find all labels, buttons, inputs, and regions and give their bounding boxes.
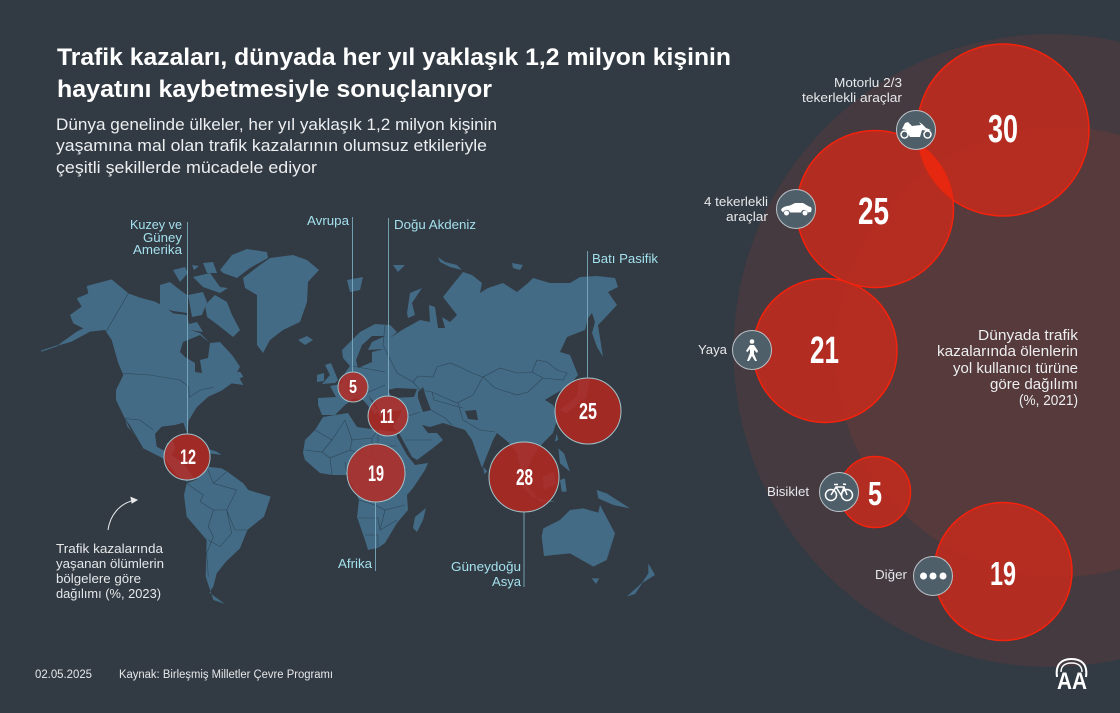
label: Güneydoğu Asya: Güneydoğu — [451, 560, 521, 574]
logo: AA: AA — [1057, 668, 1087, 695]
label: Bisiklet: Bisiklet — [767, 485, 810, 499]
title: Trafik kazaları, dünyada her yıl yaklaşık 1,2 milyon kişinin — [57, 44, 731, 71]
map: Eurasia — [317, 257, 618, 477]
subtitle: yaşamına mal olan trafik kazalarının olumsuz etkileriyle — [56, 137, 487, 155]
bubble: 19 — [934, 502, 1072, 640]
label: Diğer: Diğer — [875, 568, 907, 582]
region bubble: 19: 19 — [368, 461, 384, 486]
label: Güneydoğu Asya: Asya — [492, 575, 521, 589]
label: Yaya: Yaya — [698, 343, 727, 357]
map caption: dağılımı (%, 2023) — [56, 586, 161, 601]
title — [57, 44, 731, 103]
Caspian Sea — [418, 387, 431, 412]
region bubble: 25: 25 — [579, 398, 597, 424]
label: Kuzey ve Güney Amerika: Kuzey ve — [130, 218, 182, 232]
title: hayatını kaybetmesiyle sonuçlanıyor — [57, 76, 492, 103]
region bubble: 11 — [368, 396, 408, 436]
outer background circle — [734, 34, 1120, 667]
leader lines — [188, 217, 588, 587]
bubble values — [810, 108, 1018, 592]
bubble: 30 — [917, 44, 1089, 216]
region bubble: 19 — [347, 444, 405, 502]
logo: AA — [1057, 659, 1087, 695]
chart caption: Dünyada trafik — [978, 328, 1079, 344]
footer date: 02.05.2025 — [35, 669, 92, 681]
label: Doğu Akdeniz: Doğu Akdeniz — [394, 218, 476, 232]
label: Kuzey ve Güney Amerika — [130, 218, 183, 257]
bubble: 5 — [840, 456, 910, 528]
bubble: 25 — [796, 130, 954, 288]
chart caption — [937, 328, 1079, 409]
icon: pedestrian — [732, 330, 772, 370]
overlap lens — [920, 148, 954, 200]
map: North and South America mainland — [41, 279, 271, 604]
icon: motorcycle — [896, 110, 936, 150]
road user bubbles — [753, 44, 1089, 640]
footer source: Kaynak: Birleşmiş Milletler Çevre Programı — [119, 669, 333, 681]
label: 4 tekerlekli araçlar — [704, 195, 768, 224]
label: Motorlu 2/3 tekerlekli araçlar — [802, 76, 902, 105]
label: Motorlu 2/3 tekerlekli araçlar: Motorlu 2/3 — [834, 76, 902, 90]
chart caption: yol kullanıcı türüne — [953, 361, 1078, 377]
region bubble: 12: 12 — [180, 446, 196, 469]
subtitle: çeşitli şekillerde mücadele ediyor — [56, 159, 318, 177]
Hudson Bay — [180, 335, 210, 373]
chart caption: kazalarında ölenlerin — [937, 344, 1078, 360]
world map — [41, 249, 655, 604]
Black Sea — [388, 388, 417, 398]
inner background circle — [835, 127, 1120, 577]
bubble: 21 — [753, 278, 897, 422]
bubble values: 19 — [990, 555, 1016, 592]
label: Motorlu 2/3 tekerlekli araçlar: tekerlekli araçlar — [802, 91, 902, 105]
region bubble: 28 — [489, 442, 559, 512]
map: Asia Pacific islands and Oceania — [483, 378, 655, 597]
region bubble: 28: 28 — [516, 464, 533, 490]
bubble values: 25 — [858, 191, 889, 233]
bubble values: 5 — [868, 475, 882, 512]
region bubble: 5 — [338, 372, 368, 402]
region bubble: 11: 11 — [380, 406, 394, 428]
bubble values: 21 — [810, 330, 839, 372]
icon: bicycle — [820, 472, 858, 512]
map caption: Trafik kazalarında — [56, 541, 164, 556]
region bubble: 25 — [555, 378, 621, 444]
label: 4 tekerlekli araçlar: araçlar — [726, 210, 768, 224]
Baltic Sea — [356, 336, 385, 368]
label: 4 tekerlekli araçlar: 4 tekerlekli — [704, 195, 768, 209]
arrow — [108, 498, 137, 530]
label: Güneydoğu Asya — [451, 560, 521, 589]
label: Avrupa: Avrupa — [307, 214, 349, 228]
subtitle: Dünya genelinde ülkeler, her yıl yaklaşık 1,2 milyon kişinin — [56, 116, 497, 134]
label: Kuzey ve Güney Amerika: Güney — [143, 231, 183, 245]
region bubble: 12 — [164, 434, 210, 480]
icon: car — [776, 190, 816, 228]
map caption — [56, 541, 164, 601]
chart caption: (%, 2021) — [1019, 393, 1078, 409]
map caption: yaşanan ölümlerin — [56, 556, 164, 571]
subtitle — [56, 116, 497, 177]
map caption: bölgelere göre — [56, 571, 141, 586]
chart caption: göre dağılımı — [990, 377, 1078, 393]
label: Batı Pasifik: Batı Pasifik — [592, 252, 659, 266]
map: Arctic islands and Greenland — [160, 249, 319, 373]
map: Africa — [303, 413, 428, 550]
icon: other — [914, 556, 952, 596]
label: Kuzey ve Güney Amerika: Amerika — [133, 243, 182, 257]
label: Afrika: Afrika — [338, 557, 372, 571]
region bubble: 5: 5 — [349, 377, 357, 397]
bubble values: 30 — [988, 108, 1018, 151]
